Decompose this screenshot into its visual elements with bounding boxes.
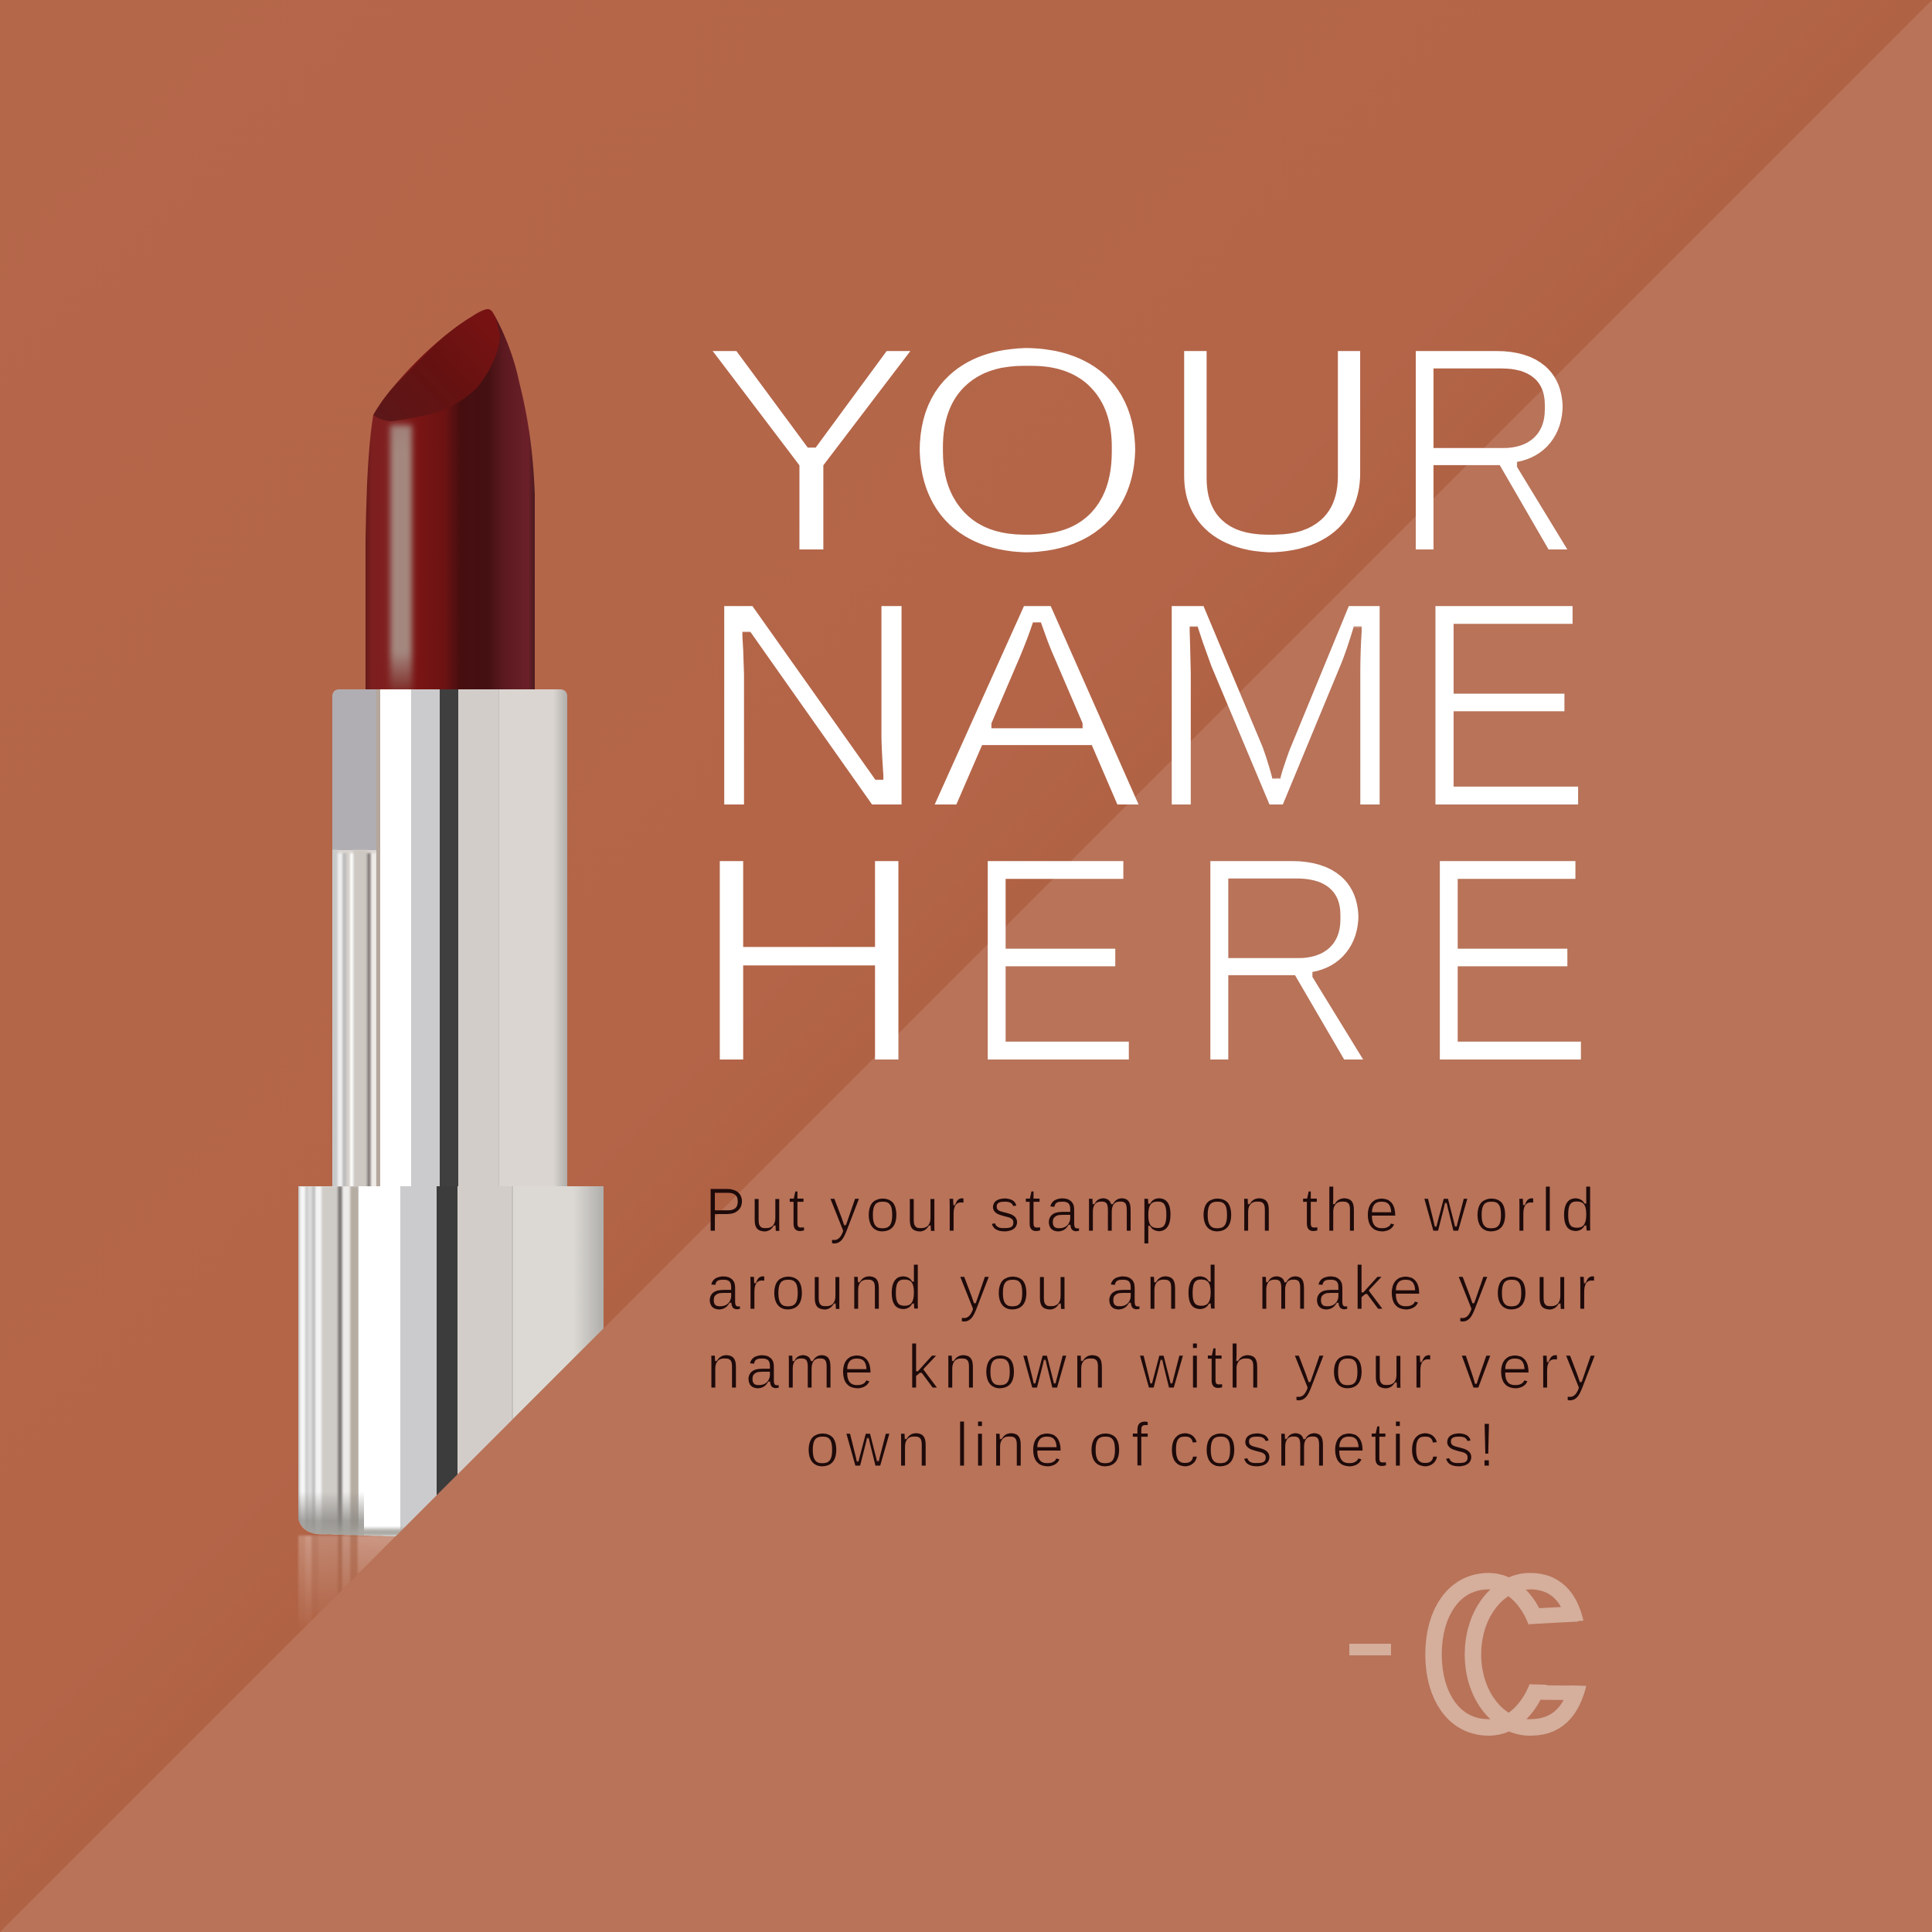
headline: YOUR NAME HERE: E: [961, 794, 1145, 1124]
headline: YOUR NAME HERE: E: [1409, 539, 1594, 869]
bullet slanted cut face: [373, 308, 500, 421]
headline: YOUR NAME HERE: A: [928, 539, 1145, 869]
paragraph: make: [1257, 1253, 1423, 1322]
headline: YOUR NAME HERE: Y: [698, 284, 925, 614]
paragraph: you: [959, 1253, 1070, 1322]
logo signature: [1349, 1581, 1582, 1727]
paragraph: on: [1200, 1175, 1274, 1244]
headline: YOUR NAME HERE: U: [1155, 284, 1389, 614]
paragraph: line: [955, 1410, 1064, 1479]
bullet highlight: [390, 425, 412, 692]
lipstick lower base: [297, 1186, 604, 1536]
paragraph: and: [1106, 1253, 1219, 1322]
paragraph: around: [706, 1253, 923, 1322]
paragraph: own: [805, 1410, 930, 1479]
paragraph: world: [1423, 1175, 1595, 1244]
paragraph: known: [907, 1332, 1107, 1401]
lipstick upper tube: [331, 689, 567, 1190]
paragraph: Put: [705, 1175, 805, 1244]
signature dash: [1349, 1644, 1391, 1655]
headline: YOUR NAME HERE: [689, 284, 1597, 1124]
headline: YOUR NAME HERE: R: [1389, 284, 1587, 614]
lipstick: [297, 305, 604, 1632]
paragraph: your: [829, 1175, 965, 1244]
paragraph: the: [1301, 1175, 1399, 1244]
headline: YOUR NAME HERE: H: [689, 794, 930, 1124]
paragraph: cosmetics!: [1168, 1410, 1495, 1479]
headline: YOUR NAME HERE: O: [900, 284, 1155, 614]
headline: YOUR NAME HERE: N: [693, 539, 933, 869]
paragraph: your: [1294, 1332, 1432, 1401]
paragraph: [705, 1175, 1596, 1479]
lipstick floor reflection: [298, 1535, 396, 1620]
lipstick bullet: [363, 305, 537, 692]
paragraph: of: [1088, 1410, 1149, 1479]
paragraph: name: [706, 1332, 874, 1401]
headline: YOUR NAME HERE: M: [1141, 539, 1410, 869]
headline: YOUR NAME HERE: E: [1413, 794, 1597, 1124]
headline: YOUR NAME HERE: R: [1184, 794, 1383, 1124]
paragraph: very: [1461, 1332, 1596, 1401]
paragraph: stamp: [989, 1175, 1174, 1244]
paragraph: with: [1138, 1332, 1262, 1401]
CC monogram: [1434, 1581, 1582, 1727]
paragraph: your: [1458, 1253, 1596, 1322]
